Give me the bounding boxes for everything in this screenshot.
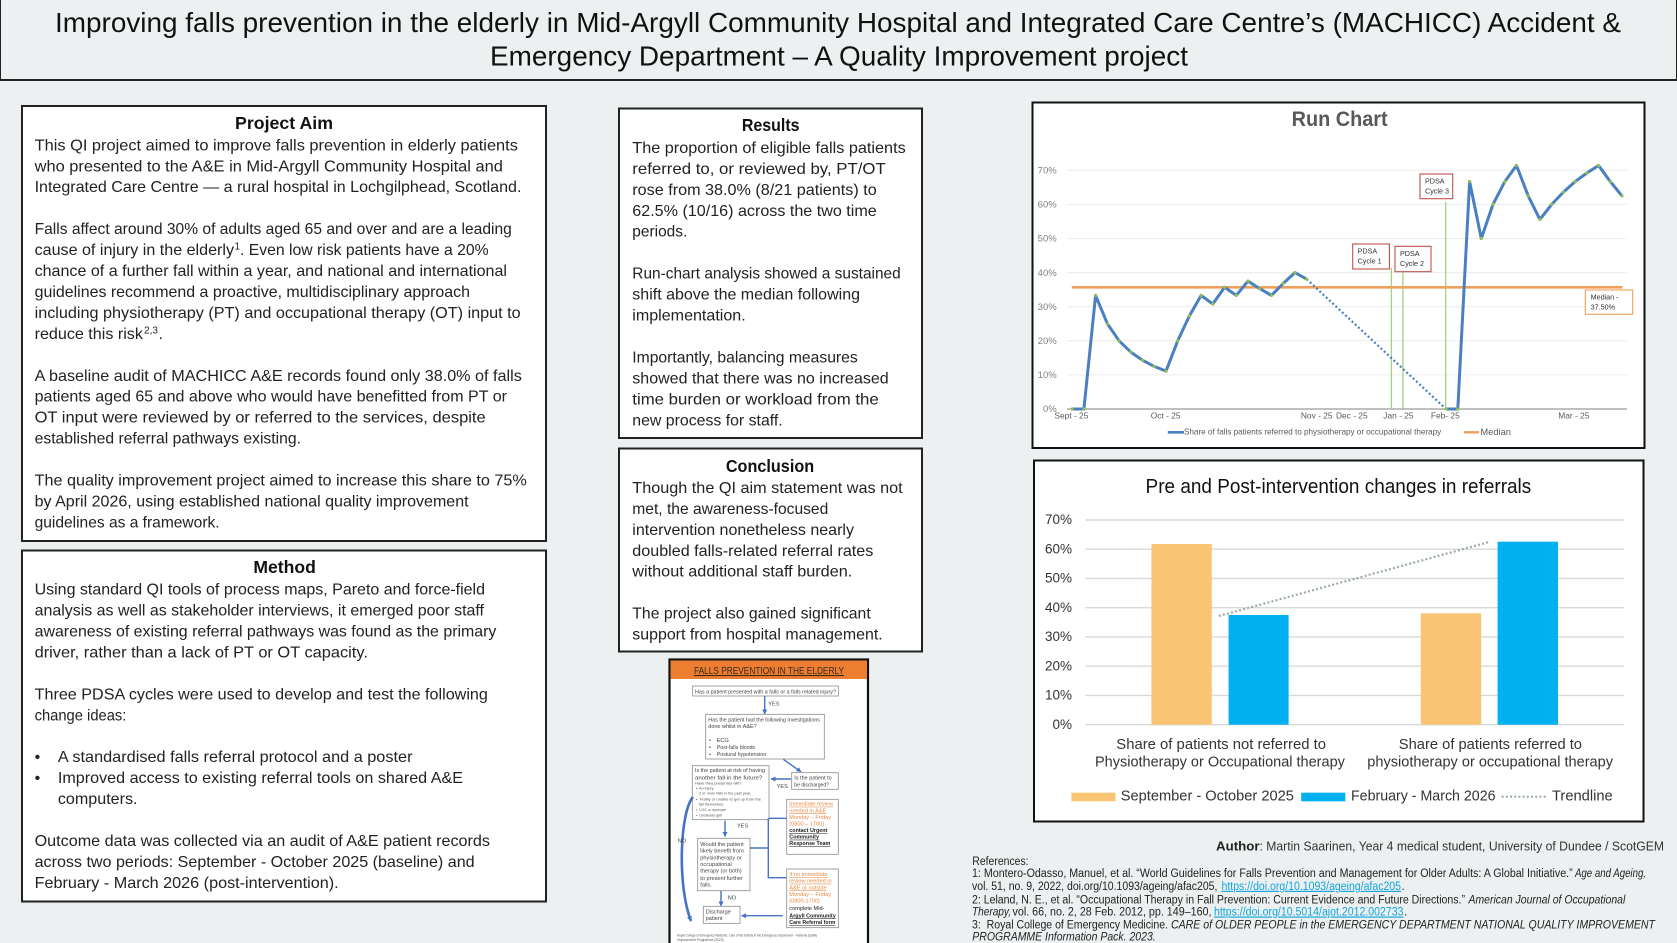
flow box: benefit from therapy: falls. [700,883,712,889]
callout: PDSA cycle 2 [1395,246,1431,272]
text: method paragraphs: driver, rather than a lack of PT or OT capacity. [35,644,368,662]
arrow: no to discharge [721,891,737,906]
flow box: investigations: • [709,738,711,744]
bar chart axes and gridlines: 50% [1045,571,1072,586]
bars: February - March 2026 [1229,542,1558,725]
text: aim paragraphs: 1 [234,242,240,253]
flow box: investigations: Has the patient had the following investigations [708,717,820,723]
text: results paragraphs: Importantly, balancing measures [632,349,858,366]
flow box: benefit from therapy [698,838,750,891]
references: https://doi.org/10.5014/ajot.2012.002733 [1214,906,1404,918]
flow box: discharge patient: Discharge [706,909,731,915]
run chart axes and gridlines: Sept - 25 [1054,410,1089,420]
text: results paragraphs: showed that there was no increased [632,370,889,387]
arrow: curved no to discharge: NO [678,839,687,845]
callout: PDSA cycle 3: Cycle 3 [1425,187,1449,196]
bar chart axes and gridlines: 70% [1045,512,1072,527]
flow box: immediate review: Response Team [789,841,830,847]
poster header: FALLS PREVENTION IN THE ELDERLY [694,665,844,677]
text: aim paragraphs: The quality improvement project aimed to increase this share to 75% [35,472,527,490]
flow box: risk of another fall: fall themselves [699,802,724,806]
arrow: referral form to discharge [742,915,783,917]
arrow: yes to risk question [771,779,791,790]
flow box: benefit from therapy: likely benefit from [700,849,744,855]
PDSA cycle marker lines [1391,202,1446,409]
references: 2: Leland, N. E., et al. “Occupational Therapy in Fall Prevention: Current Evidence and Future Directions.” [972,894,1465,906]
flow box: investigations [706,714,824,759]
legend: run chart: Median [1480,427,1511,438]
text: method paragraphs: computers. [58,791,138,808]
run chart axes and gridlines: Oct - 25 [1151,410,1181,420]
chart title: Pre and Post-intervention changes in referrals [1146,476,1531,498]
text: results paragraphs: The proportion of eligible falls patients [632,140,906,157]
run chart axes and gridlines: 70% [1038,166,1057,176]
text: aim paragraphs: who presented to the A&E in Mid-Argyll Community Hospital and [34,158,503,175]
text: method paragraphs: February - March 2026 (post-intervention). [35,875,339,892]
flow box: benefit from therapy: occupational [700,862,732,868]
callout: median value: 37.50% [1591,303,1616,312]
flow box: risk of another fall [692,766,769,820]
text: method paragraphs: Three PDSA cycles were used to develop and test the following [35,686,488,703]
text: results paragraphs: Run-chart analysis showed a sustained [632,266,901,283]
flow box: no immediate review: A&E or outside [789,885,827,891]
panel: results [619,108,922,438]
median line [1072,286,1622,289]
flow box: immediate review: contact Urgent [789,828,828,834]
text: conclusion paragraphs: Though the QI aim statement was not [632,480,903,497]
flow box: immediate review: Community [789,835,819,841]
references: 1: Montero-Odasso, Manuel, et al. “World Guidelines for Falls Prevention and Management for Older Adults: A Global Initiative.” [972,868,1573,880]
category labels: Share of patients referred to [1399,737,1582,753]
flow box: to be discharged [792,773,838,789]
bar chart axes and gridlines: 0% [1052,717,1072,732]
poster source note: Improvement Programme (2023) [677,938,724,942]
bars: September - October 2025 [1151,544,1481,725]
text: results paragraphs: rose from 38.0% (8/21 patients) to [632,182,877,199]
heading: results: Results [742,115,800,135]
heading: method: Method [253,557,316,577]
text: results paragraphs: new process for staff. [632,412,783,429]
run chart axes and gridlines: Mar - 25 [1558,410,1590,420]
flow box: no immediate review: (0800-1700) [789,899,820,905]
heading: conclusion: Conclusion [726,456,814,476]
references: . [1402,881,1405,893]
bar chart axes and gridlines [1045,512,1624,732]
panel: conclusion [619,448,922,652]
references: vol. 51, no. 9, 2022, doi.org/10.1093/ageing/afac205, [972,881,1217,893]
author line: Author [1216,839,1260,854]
callout: median value: Median - [1591,293,1619,302]
text: aim paragraphs: guidelines recommend a proactive, multidisciplinary approach [35,284,470,301]
panel: pre and post-intervention bar chart [1034,460,1644,822]
run chart axes and gridlines: Feb- 25 [1431,410,1460,420]
text: aim paragraphs: A baseline audit of MACHICC A&E records found only 38.0% of falls [35,368,522,385]
text: results paragraphs: time burden or workload from the [632,391,879,408]
flow box: investigations: done whilst in A&E? [708,724,757,730]
text: conclusion paragraphs [631,480,903,644]
text: method paragraphs [35,582,496,892]
run chart axes and gridlines: 30% [1038,302,1057,313]
flow box: no immediate review: Care Referral form [789,920,835,926]
legend: bar chart: September - October 2025 [1121,788,1294,804]
text: method paragraphs: across two periods: September - October 2025 (baseline) and [35,854,475,871]
flow box: investigations: ECG [717,738,729,744]
flow box: risk of another fall: Have they presented with: [695,782,742,786]
bar chart axes and gridlines: 40% [1045,600,1072,615]
callout: PDSA cycle 1 [1353,244,1389,269]
arrow: yes to risk question: YES [777,784,788,790]
chart title: Run Chart [1292,108,1388,131]
panel: falls prevention flowchart poster [670,660,868,943]
text: aim paragraphs: by April 2026, using established national quality improvement [35,493,469,510]
flow box: presented with fall [693,686,838,696]
category labels [1095,737,1614,771]
references: https://doi.org/10.1093/ageing/afac205 [1222,881,1401,893]
category labels: Share of patients not referred to [1116,737,1326,753]
references: American Journal of Occupational [1468,894,1626,906]
text: aim paragraphs: reduce this risk [35,326,144,343]
panel: run chart [1032,102,1644,448]
flow box: benefit from therapy: to present further [700,876,743,882]
heading: project aim: Project Aim [235,113,333,133]
callout: PDSA cycle 2: Cycle 2 [1400,259,1424,268]
flow box: discharge patient [703,906,740,923]
flow box: investigations: Post-falls bloods [717,745,755,751]
flow box: risk of another fall: • LOC or syncope [696,808,726,812]
text: aim paragraphs: . Even low risk patients have a 20% [240,242,489,259]
text: aim paragraphs: guidelines as a framework. [35,514,220,531]
text: conclusion paragraphs: doubled falls-related referral rates [632,543,873,560]
poster header [670,660,867,679]
text: results paragraphs: 62.5% (10/16) across the two time [632,203,877,220]
flow box: no immediate review [787,869,838,928]
text: results paragraphs [632,140,906,429]
flow box: benefit from therapy: physiotherapy or [700,855,742,861]
text: aim paragraphs: cause of injury in the elderly [35,242,234,259]
legend: bar chart: Trendline [1552,788,1613,804]
flow box: benefit from therapy: therapy (or both) [700,869,742,875]
text: results paragraphs: referred to, or reviewed by, PT/OT [632,161,886,178]
run chart axes and gridlines: 50% [1038,234,1057,245]
text: aim paragraphs: OT input were reviewed by or referred to the services, despite [35,410,486,427]
legend: run chart: Share of falls patients referred to physiotherapy or occupational therapy [1184,427,1442,437]
poster source note [677,934,817,942]
flow box: immediate review: Immediate review [789,802,834,808]
category labels: physiotherapy or occupational therapy [1367,755,1614,771]
run chart axes and gridlines [1038,166,1627,420]
references: References: [972,856,1029,868]
run chart axes and gridlines: 60% [1038,200,1057,211]
arrow: curved no to discharge [678,797,693,921]
flow box: risk of another fall: • Unsteady gait [696,813,722,817]
series line: share of falls patients referred [1071,164,1624,411]
flow box: investigations: • [709,752,711,758]
flow box: immediate review [787,799,838,854]
flow box: immediate review: Monday – Friday [789,815,831,821]
text: results paragraphs: implementation. [632,308,746,324]
callout: PDSA cycle 1: Cycle 1 [1358,257,1382,266]
flow box: risk of another fall: • An injury, [696,787,714,791]
poster source note: Royal College of Emergency Medicine: Care of the Elderly in the Emergency Department – National Quality [677,934,817,938]
callout: PDSA cycle 2: PDSA [1400,249,1420,258]
flow box: investigations: • [709,745,711,751]
text: aim paragraphs: Integrated Care Centre — a rural hospital in Lochgilphead, Scotland. [35,179,521,196]
text: method paragraphs: change ideas: [35,707,126,724]
flow box: no immediate review: Monday – Friday [789,892,831,898]
references: Therapy, [972,906,1011,918]
text: conclusion paragraphs: without additional staff burden. [631,564,852,581]
bar chart axes and gridlines: 30% [1045,629,1072,644]
flow box: to be discharged: be discharged? [794,783,829,789]
trendline [1219,542,1490,616]
text: conclusion paragraphs: met, the awareness-focused [632,501,828,518]
text: conclusion paragraphs: support from hospital management. [632,627,883,644]
text: aim paragraphs: . [158,326,163,343]
references: Age and Ageing, [1574,868,1646,880]
run chart axes and gridlines: Jan - 25 [1383,410,1414,420]
arrow: yes to investigations: YES [768,701,780,707]
callout: median value [1585,290,1633,314]
flow box: risk of another fall: another fall in the future? [695,775,762,781]
run chart axes and gridlines: Dec - 25 [1336,410,1368,420]
category labels: Physiotherapy or Occupational therapy [1095,755,1346,771]
text: method paragraphs: • [35,749,40,766]
text: method paragraphs: Improved access to existing referral tools on shared A&E [58,770,463,787]
flow box: immediate review: needed in A&E [789,808,827,814]
text: method paragraphs: Using standard QI tools of process maps, Pareto and force-field [35,582,485,599]
text: method paragraphs: • [35,770,40,787]
arrow: no to discharge: NO [728,895,737,901]
flow box: discharge patient: patient [706,916,723,922]
flow box: risk of another fall: 2 or more falls in the past year, [699,791,751,795]
bar chart axes and gridlines: 10% [1045,688,1072,703]
references: 3: Royal College of Emergency Medicine. [972,920,1168,932]
text: aim paragraphs: chance of a further fall within a year, and national and international [35,263,507,280]
text: conclusion paragraphs: intervention nonetheless nearly [632,522,854,539]
title banner: Improving falls prevention in the elderly in Mid-Argyll Community Hospital and Integrated Care Centre’s (MACHICC) Accident & [55,7,1621,38]
references: . [1404,906,1407,918]
text: aim paragraphs: including physiotherapy (PT) and occupational therapy (OT) input to [35,305,521,322]
callout: PDSA cycle 3: PDSA [1425,177,1445,186]
text: aim paragraphs: established referral pathways existing. [35,431,301,448]
run chart axes and gridlines: Nov - 25 [1301,410,1333,420]
text: aim paragraphs [34,137,527,531]
arrow: yes to benefit question [725,821,748,836]
legend: bar chart: February - March 2026 [1351,788,1496,804]
text: method paragraphs: awareness of existing referral pathways was found as the primary [35,624,496,640]
title banner: Emergency Department – A Quality Improvement project [490,41,1188,72]
text: aim paragraphs: This QI project aimed to improve falls prevention in elderly patients [35,137,518,154]
panel: project aim [22,106,546,541]
run chart axes and gridlines: 40% [1038,268,1057,279]
flow box: risk of another fall: • Frailty or unable to get up from the [696,798,761,802]
flow box: no immediate review: review needed in [789,879,832,885]
legend: run chart [1168,427,1511,438]
title banner [0,0,1677,80]
callout: PDSA cycle 1: PDSA [1358,247,1377,256]
text: method paragraphs: analysis as well as stakeholder interviews, it emerged poor staff [35,603,485,620]
references: vol. 66, no. 2, 28 Feb. 2012, pp. 149–160, [1012,906,1212,918]
flow box: no immediate review: complete Mid- [789,906,825,912]
panel: method [22,550,546,902]
text: aim paragraphs: patients aged 65 and above who would have benefitted from PT or [35,389,508,406]
run chart axes and gridlines: 0% [1043,404,1057,415]
bar chart axes and gridlines: 20% [1045,658,1072,673]
flow box: presented with fall: Has a patient presented with a falls or a falls related injury? [695,689,836,695]
text: conclusion paragraphs: The project also gained significant [632,606,871,623]
arrow: yes to benefit question: YES [737,823,748,829]
flow box: to be discharged: Is the patient to [794,775,832,781]
text: aim paragraphs: 2,3 [144,326,158,337]
flow box: investigations: Postural hypotension [717,752,766,758]
run chart axes and gridlines: 20% [1038,336,1057,347]
flow box: immediate review: (0800 – 1700) [789,821,824,827]
arrow: yes to investigations [765,696,780,714]
arrow: investigations to discharge question [783,759,801,772]
callout: PDSA cycle 3 [1420,174,1453,199]
text: aim paragraphs: Falls affect around 30% of adults aged 65 and over and are a leading [35,221,512,238]
references [972,856,1656,943]
text: method paragraphs: A standardised falls referral protocol and a poster [58,749,413,766]
flow box: no immediate review: If no immediate [789,872,828,878]
bar chart axes and gridlines: 60% [1045,541,1072,556]
flow box: no immediate review: Argyll Community [789,913,836,919]
text: results paragraphs: shift above the median following [632,287,860,304]
run chart axes and gridlines: 10% [1038,370,1057,381]
text: method paragraphs: Outcome data was collected via an audit of A&E patient records [35,833,490,850]
legend: bar chart [1071,788,1613,804]
text: results paragraphs: periods. [632,224,687,241]
flow box: benefit from therapy: Would the patient [700,842,744,848]
connector: pathways to referral boxes [750,818,787,878]
flow box: risk of another fall: Is the patient at risk of having [695,768,765,774]
